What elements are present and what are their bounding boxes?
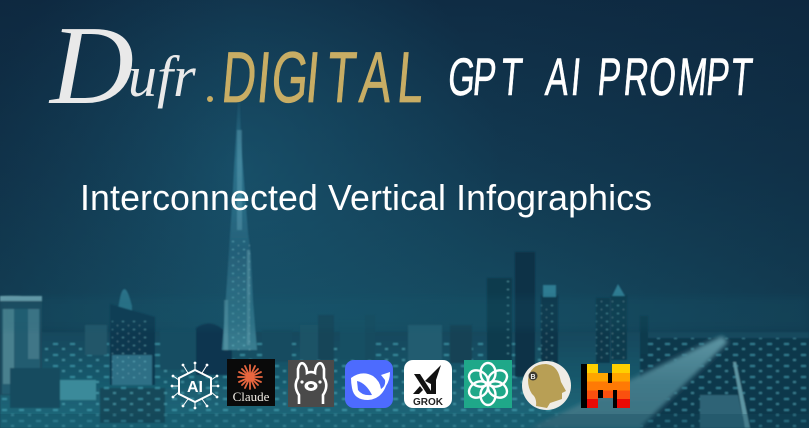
icon row	[171, 359, 630, 410]
subtitle: Interconnected Vertical Infographics	[80, 178, 652, 218]
icon: DeepSeek whale	[345, 360, 393, 408]
digital: DIGITAL	[219, 37, 428, 117]
mid buildings	[262, 330, 292, 362]
icon: gold head portrait: B	[530, 374, 536, 381]
highway	[530, 336, 728, 428]
icon: AI circuit chip	[171, 362, 219, 409]
icon: Claude	[227, 359, 275, 406]
Burj tower	[222, 100, 257, 350]
icon: Grok	[404, 360, 452, 408]
signature: Dufr: D	[48, 4, 134, 128]
icon: AI circuit chip: AI	[187, 379, 203, 396]
icon: Claude: Claude	[233, 389, 270, 404]
icon: ChatGPT	[464, 360, 512, 408]
left buildings	[0, 295, 42, 395]
title: logo wordmark	[48, 4, 428, 128]
background: city skyline	[0, 100, 809, 428]
icon: gold head portrait	[522, 361, 571, 410]
background: horizon haze	[0, 296, 809, 428]
low city band	[0, 332, 809, 428]
signature: Dufr: ufr	[128, 44, 196, 109]
icon: Ollama llama	[288, 360, 334, 407]
heading: GPT AI PROMPT: GPT AI PROMPT	[446, 48, 755, 107]
dot	[207, 96, 213, 102]
icon: Grok: GROK	[413, 397, 444, 408]
icon: Mistral M	[581, 364, 630, 408]
right towers	[487, 278, 512, 362]
